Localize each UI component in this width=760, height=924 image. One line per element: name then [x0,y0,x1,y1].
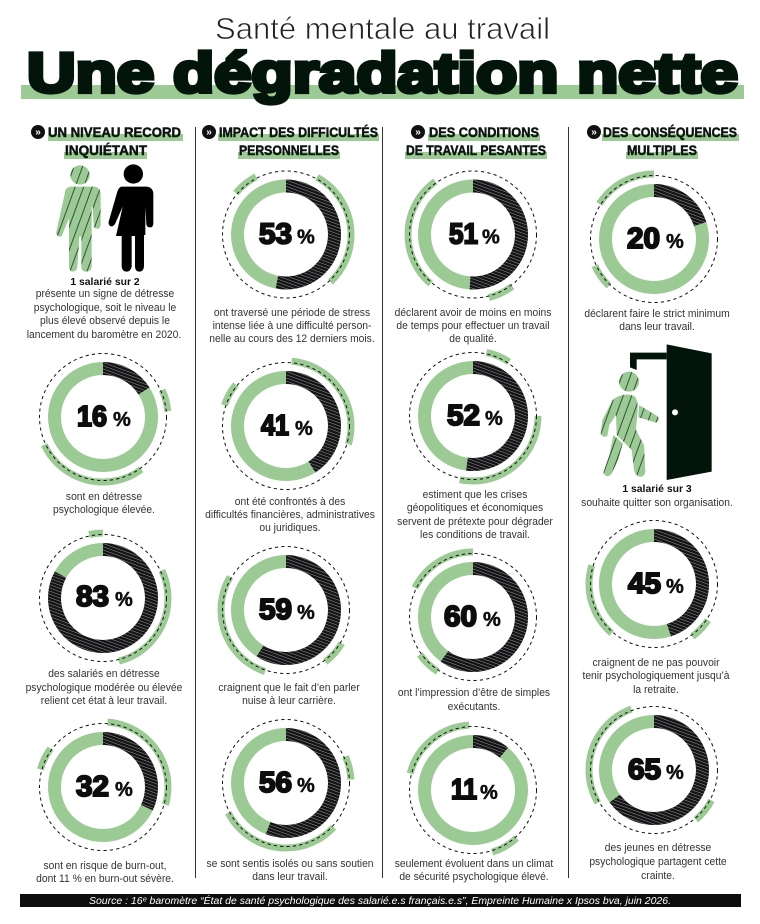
heading: column 4 [587,124,739,159]
heading: column 3: DES CONDITIONS [429,124,539,140]
donut: 51 %: 51 [449,218,478,250]
text: 1 salarié sur 2: 1 salarié sur 2 [70,277,140,288]
text: 83 %: relient cet état à leur travail. [41,695,167,707]
text: 56 %: dans leur travail. [252,871,328,883]
text: 65 %: crainte. [641,870,675,882]
text: 53 %: ont traversé une période de stress [214,307,370,319]
text: 56 %: se sont sentis isolés ou sans soutien [206,858,374,870]
donut: 59 % [221,545,351,675]
heading: column 1: » [35,127,41,138]
text: 1 salarié sur 2: présente un signe de détresse [36,288,174,300]
text: 65 % [589,842,727,882]
text: 32 %: dont 11 % en burn-out sévère. [36,873,174,885]
text: 41 %: ont été confrontés à des [235,496,345,508]
heading: column 3: DE TRAVAIL PESANTES [406,142,546,158]
donut: 52 %: 52 [447,400,480,432]
donut: 20 % [589,174,719,304]
donut: 45 %: % [666,576,684,598]
donut: 60 %: 60 [444,601,477,633]
donut: 16 % [38,352,168,482]
text: 1 salarié sur 2: lancement du baromètre en 2020. [27,329,181,341]
heading: column 4: DES CONSÉQUENCES [603,124,737,140]
donut: 59 %: 59 [259,594,292,626]
text: 65 %: des jeunes en détresse [605,842,711,854]
heading: column 3: » [415,127,421,138]
text: 53 % [209,307,375,345]
text: 41 %: difficultés financières, administratives [205,509,375,521]
text: 56 % [206,858,374,883]
donut: 11 %: 11 [451,774,477,806]
donut: 65 %: 65 [628,754,661,786]
donut: 83 %: 83 [76,581,109,613]
text: 11 %: seulement évoluent dans un climat [395,858,553,870]
donut: 53 %: 53 [259,218,292,250]
subtitle: Santé mentale au travail [215,11,550,46]
text: 16 %: sont en détresse [66,491,142,503]
donut: 65 % [589,705,719,835]
heading: column 4: MULTIPLES [627,142,697,158]
text: 53 %: nelle au cours des 12 derniers mois. [209,333,375,345]
heading: column 3 [405,124,547,159]
text: 60 % [398,687,550,713]
text: 60 %: ont l’impression d’être de simples [398,687,550,699]
donut: 52 % [408,351,538,481]
heading: column 2: » [206,127,212,138]
text: 52 %: servent de prétexte pour dégrader [397,516,553,528]
text: 1 salarié sur 2: psychologique, soit le niveau le [34,302,176,314]
text: 45 %: la retraite. [633,684,679,696]
text: 32 % [36,860,174,885]
text: 51 %: de temps pour effectuer un travail [396,320,550,332]
text: 1 salarié sur 3 [581,484,733,509]
text: 60 %: exécutants. [448,701,500,713]
donut: 20 %: % [666,231,684,253]
text: 16 % [53,491,155,516]
text: 52 %: les conditions de travail. [420,529,530,541]
text: 52 % [397,489,553,541]
heading: column 2: PERSONNELLES [239,142,339,158]
heading: column 4: » [591,127,597,138]
donut: 56 %: 56 [259,767,292,799]
text: 20 %: déclarent faire le strict minimum [584,308,730,320]
text: 20 %: dans leur travail. [619,321,695,333]
text: 65 %: psychologique partagent cette [589,856,727,868]
donut: 59 %: % [297,602,315,624]
donut: 20 %: 20 [627,223,660,255]
heading: column 1: UN NIVEAU RECORD [48,124,181,140]
donut: 16 %: 16 [77,401,107,433]
donut: 32 %: % [115,779,133,801]
text: 1 salarié sur 3: souhaite quitter son organisation. [581,497,733,509]
text: 45 %: craignent de ne pas pouvoir [592,657,720,669]
text: 11 %: de sécurité psychologique élevé. [399,871,549,883]
source footer: Source : 16ᵉ baromètre “État de santé psychologique des salarié.e.s français.e.s”, Empreinte Humaine x Ipsos bva, juin 2026. [89,894,671,907]
donut: 45 % [589,519,719,649]
donut: 16 %: % [113,409,131,431]
text: 83 % [26,668,182,707]
text: 1 salarié sur 2: plus élevé observé depuis le [40,315,170,327]
text: 51 %: déclarent avoir de moins en moins [395,307,551,319]
text: 83 %: des salariés en détresse [48,668,160,680]
icon: two figures [56,164,153,272]
text: 32 %: sont en risque de burn-out, [43,860,167,872]
donut: 56 % [221,718,351,848]
donut: 45 %: 45 [628,568,661,600]
donut: 60 % [408,552,538,682]
donut: 51 %: % [482,226,500,248]
donut: 11 %: % [480,782,498,804]
donut: 51 % [408,170,538,300]
text: 52 %: estiment que les crises [423,489,527,501]
text: 45 %: tenir psychologiquement jusqu’à [582,670,730,682]
text: 41 %: ou juridiques. [259,522,321,534]
donut: 11 % [408,725,538,855]
title: Une dégradation nette [27,41,738,104]
donut: 32 %: 32 [76,771,109,803]
heading: column 2: IMPACT DES DIFFICULTÉS [219,124,378,140]
donut: 56 %: % [297,775,315,797]
text: 52 %: géopolitiques et économiques [407,502,543,514]
text: 51 % [395,307,551,345]
text: 11 % [395,858,553,883]
text: 51 %: de qualité. [449,333,497,345]
donut: 41 % [221,361,351,491]
donut: 32 % [38,722,168,852]
donut: 83 %: % [115,589,133,611]
text: 45 % [582,657,730,696]
text: 53 %: intense liée à une difficulté person- [213,320,372,332]
text: 1 salarié sur 3: 1 salarié sur 3 [622,484,692,495]
text: 41 % [205,496,375,534]
text: 59 %: nuise à leur carrière. [242,695,336,707]
donut: 60 %: % [483,609,501,631]
text: 16 %: psychologique élevée. [53,504,155,516]
text: 83 %: psychologique modérée ou élevée [26,682,182,694]
heading: column 1 [31,124,183,159]
donut: 52 %: % [485,408,503,430]
donut: 41 %: 41 [261,410,289,442]
donut: 53 %: % [297,226,315,248]
heading: column 1: INQUIÉTANT [65,142,147,158]
donut: 83 % [38,533,168,663]
donut: 41 %: % [295,418,313,440]
text: 20 % [584,308,730,333]
text: 1 salarié sur 2 [27,277,181,341]
text: 59 %: craignent que le fait d’en parler [218,682,360,694]
donut: 53 % [221,170,351,300]
donut: 65 %: % [666,762,684,784]
text: 59 % [218,682,360,707]
heading: column 2 [202,124,379,159]
icon: person leaving through door [601,344,712,480]
